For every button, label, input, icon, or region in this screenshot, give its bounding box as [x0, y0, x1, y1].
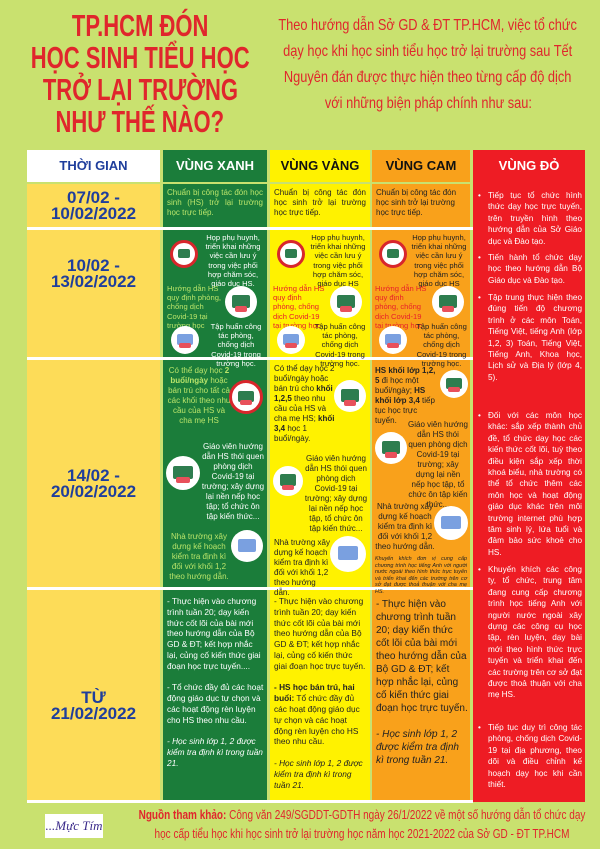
date row 3: 20/02/2022 [51, 482, 136, 501]
footer source [139, 808, 586, 841]
header: vung vang: VÙNG VÀNG [281, 158, 359, 173]
column backgrounds [27, 184, 160, 800]
icon: clipboard [277, 326, 305, 354]
icon: teacher [225, 286, 257, 318]
icon: meeting [170, 240, 198, 268]
text: huong dan: Hướng dẫn HS quy định phòng, chống dịch Covid-19 tại trường học [167, 284, 221, 330]
title: TRỞ LẠI TRƯỜNG [42, 72, 238, 107]
text: huong dan: Hướng dẫn HS quy định phòng, chống dịch Covid-19 tại trường học [375, 284, 426, 330]
date row 2: 10/02 - [67, 256, 120, 275]
icon: teacher [273, 466, 303, 496]
text: kiem tra: Nhà trường xây dựng kế hoạch kiểm tra định kì đối với khối 1,2 theo hướng dẫn. [375, 502, 435, 551]
logo: muc tim [45, 814, 103, 838]
text: tap huan: Tập huấn công tác phòng, chống dịch Covid-19 trong trường học. [315, 322, 365, 368]
row4 xanh: - Học sinh lớp 1, 2 được kiểm tra định kì trong tuần 21. [167, 736, 263, 768]
date row 4: TỪ [81, 688, 106, 707]
row2 xanh [167, 233, 261, 368]
header: thoi gian [27, 150, 160, 182]
icon: teacher [166, 456, 200, 490]
header: vung xanh: VÙNG XANH [176, 158, 254, 173]
text: hop phu huynh: Họp phụ huynh, triển khai những việc cần lưu ý trong việc phối hợp chăm sóc, giáo dục HS [412, 233, 466, 288]
header: vung do: VÙNG ĐỎ [499, 158, 559, 173]
title: HỌC SINH TIỂU HỌC [31, 40, 249, 75]
header: thoi gian: THỜI GIAN [59, 158, 128, 173]
row4 vang: - Thực hiện vào chương trình tuần 20; dạy kiến thức cốt lõi của bài mới theo hướng dẫn của Bộ GD & ĐT; kết hợp nhắc lại, củng cố kiến thức giai đoạn học trực tuyến. [274, 596, 365, 671]
icon: classroom [440, 370, 468, 398]
text: tap huan: Tập huấn công tác phòng, chống dịch Covid-19 trong trường học. [416, 322, 467, 368]
date row 4 [51, 688, 136, 723]
title [31, 8, 249, 139]
date row 2: 13/02/2022 [51, 272, 136, 291]
text: kiem tra: Nhà trường xây dựng kế hoạch kiểm tra định kì đối với khối 1,2 theo hướng dẫn. [274, 538, 330, 597]
date row 1 [51, 188, 136, 223]
row4 cam [376, 599, 468, 766]
row4 cam: - Học sinh lớp 1, 2 được kiểm tra định kì trong tuần 21. [376, 729, 459, 766]
footer source: học cấp tiểu học khi học sinh trở lại trường học năm học 2021-2022 của Sở GD - ĐT TP.HCM [155, 827, 569, 841]
text: 2 buoi: Có thể dạy học 2 buổi/ngày hoặc bán trú cho khối 1,2,5 theo nhu cầu của HS và cha mẹ HS; khối 3,4 học 1 buổi/ngày. [274, 364, 334, 443]
icon: clipboard [171, 326, 199, 354]
text: huong dan: Hướng dẫn HS quy định phòng, chống dịch Covid-19 tại trường học [273, 284, 324, 330]
text: khuyen khich: Khuyến khích đơn vị cung cấp chương trình học tiếng Anh với người nước ngoài theo hình thức trực tuyến và triển khai đến các trường trên cơ sở đạt được thoả thuận với cha mẹ HS. [375, 556, 467, 595]
row4 vang: - Học sinh lớp 1, 2 được kiểm tra định kì trong tuần 21. [274, 758, 363, 790]
text: kiem tra: Nhà trường xây dựng kế hoạch kiểm tra định kì đối với khối 1,2 theo hướng dẫn. [169, 532, 229, 581]
date row 1: 07/02 - [67, 188, 120, 207]
row4 xanh: - Thực hiện vào chương trình tuần 20; dạy kiến thức cốt lõi của bài mới theo hướng dẫn của Bộ GD & ĐT; kết hợp nhắc lại, củng cố kiến thức giai đoạn học trực tuyến.... [167, 596, 261, 671]
icon: meeting [277, 240, 305, 268]
title: TP.HCM ĐÓN [72, 8, 208, 43]
red bullet 4: Đối với các môn học khác: sắp xếp thành chủ đề, tổ chức dạy học các kiến thức cốt lõi, tuỳ theo điều kiện sắp xếp thời khoá biểu, nhà trường có thể tổ chức thêm các môn học và hoạt động giáo dục khác trên môi trường internet phù hợp tâm sinh lý, lứa tuổi và đảm bảo sức khoẻ cho HS. [488, 411, 582, 557]
icon: checklist [330, 536, 366, 572]
date row 1: 10/02/2022 [51, 204, 136, 223]
text: hop phu huynh: Họp phụ huynh, triển khai những việc cần lưu ý trong việc phối hợp chăm sóc, giáo dục HS [311, 233, 365, 288]
logo: muc tim: ...Mực Tím [46, 818, 102, 833]
title: NHƯ THẾ NÀO? [56, 104, 224, 139]
icon: teacher [432, 286, 464, 318]
intro text: Nguyên đán được thực hiện theo từng cấp độ dịch [284, 69, 572, 86]
header: vung xanh [163, 150, 267, 182]
red bullet 5: Khuyến khích các công ty, tổ chức, trung tâm đang cung cấp chương trình học tiếng Anh với người nước ngoài xây dựng các công cụ học tập, rèn luyện, dạy bài mới theo hình thức trực tuyến và triển khai đến các trường trên cơ sở đạt được thoả thuận với cha mẹ HS. [488, 565, 582, 699]
red bullet 6: Tiếp tục duy trì công tác phòng, chống dịch Covid-19 tại địa phương, theo dõi và điều chỉnh kế hoạch dạy học khi cần thiết. [488, 723, 582, 789]
text: hop phu huynh: Họp phụ huynh, triển khai những việc cần lưu ý trong việc phối hợp chăm sóc, giáo dục HS. [206, 233, 260, 288]
header: vung cam [372, 150, 470, 182]
icon: teacher [375, 432, 407, 464]
row4 cam: - Thực hiện vào chương trình tuần 20; dạy kiến thức cốt lõi của bài mới theo hướng dẫn của Bộ GD & ĐT; kết hợp nhắc lại, củng cố kiến thức giai đoạn học trực tuyến. [376, 599, 468, 714]
intro text: với những biện pháp chính như sau: [324, 95, 531, 112]
text: tap huan: Tập huấn công tác phòng, chống dịch Covid-19 trong trường học. [211, 322, 261, 368]
row3 vang [273, 364, 367, 597]
red bullet 2: Tiến hành tổ chức dạy học theo hướng dẫn Bộ Giáo dục và Đào tạo. [488, 253, 582, 285]
icon: classroom [334, 380, 366, 412]
intro text [278, 16, 577, 112]
date row 3: 14/02 - [67, 466, 120, 485]
row1 cam: Chuẩn bị công tác đón học sinh trở lại trường học trực tiếp. [376, 188, 456, 217]
row4 xanh: - Tổ chức đầy đủ các hoạt động giáo dục tự chọn và các hoạt động rèn luyện cho HS theo nhu cầu. [167, 682, 263, 725]
text: giao vien: Giáo viên hướng dẫn HS thói quen phòng dịch Covid-19 tại trường; xây dựng lại nền nếp học tập, tổ chức ôn tập kiến thức... [408, 420, 468, 509]
text: giao vien: Giáo viên hướng dẫn HS thói quen phòng dịch Covid-19 tại trường; xây dựng lại nền nếp học tập; tổ chức ôn tập kiến thức... [202, 442, 264, 521]
header: vung vang [270, 150, 370, 182]
date row 3 [51, 466, 136, 501]
date row 2 [51, 256, 136, 291]
icon: checklist [434, 506, 468, 540]
text: khoi lop: HS khối lớp 1,2, 5 đi học một buổi/ngày; HS khối lớp 3,4 tiếp tục học trực tuyến. [375, 366, 435, 425]
icon: checklist [231, 530, 263, 562]
row3 xanh [166, 366, 264, 581]
icon: teacher [330, 286, 362, 318]
row4 xanh [167, 596, 264, 768]
header: vung cam: VÙNG CAM [386, 158, 456, 173]
icon: classroom [229, 380, 263, 414]
row1 xanh: Chuẩn bị công tác đón học sinh (HS) trở lại trường học trực tiếp. [167, 188, 263, 217]
footer source: Nguồn tham khảo: Công văn 249/SGDDT-GDTH ngày 26/1/2022 về một số hướng dẫn tổ chức dạy [139, 808, 585, 822]
text: 2 buoi: Có thể dạy học 2 buổi/ngày hoặc bán trú cho tất cả các khối theo nhu cầu của HS và cha mẹ HS [168, 366, 230, 425]
row2 cam [375, 233, 467, 368]
row3 cam [375, 366, 468, 595]
icon: clipboard [379, 326, 407, 354]
header: vung do [473, 150, 585, 182]
row1 vang: Chuẩn bị công tác đón học sinh trở lại trường học trực tiếp. [274, 188, 366, 217]
red bullet 3: Tập trung thực hiện theo đúng tiến độ chương trình ở các môn Toán, Tiếng Việt, tiếng Anh (lớp 1,2, 3) Toán, Tiếng Việt, Tiếng Anh, Khoa học, Lịch sử và Địa lý (lớp 4, 5). [488, 293, 582, 382]
row2 vang [273, 233, 365, 368]
row4 vang: - HS học bán trú, hai buổi: Tổ chức đầy đủ các hoạt động giáo dục tự chọn và các hoạt động rèn luyện cho HS theo nhu cầu. [274, 682, 360, 746]
text: giao vien: Giáo viên hướng dẫn HS thói quen phòng dịch Covid-19 tại trường; xây dựng lại nền nếp học tập, tổ chức ôn tập kiến thức... [305, 454, 367, 533]
intro text: Theo hướng dẫn Sở GD & ĐT TP.HCM, việc tổ chức [279, 17, 577, 34]
date row 4: 21/02/2022 [51, 704, 136, 723]
row4 vang [274, 596, 365, 790]
intro text: dạy học khi học sinh tiểu học trở lại trường sau Tết [283, 43, 573, 60]
icon: meeting [379, 240, 407, 268]
red bullet 1: Tiếp tục tổ chức hình thức dạy học trực tuyến, trên truyền hình theo hướng dẫn của Sở Giáo dục và Đào tạo. [488, 191, 582, 246]
